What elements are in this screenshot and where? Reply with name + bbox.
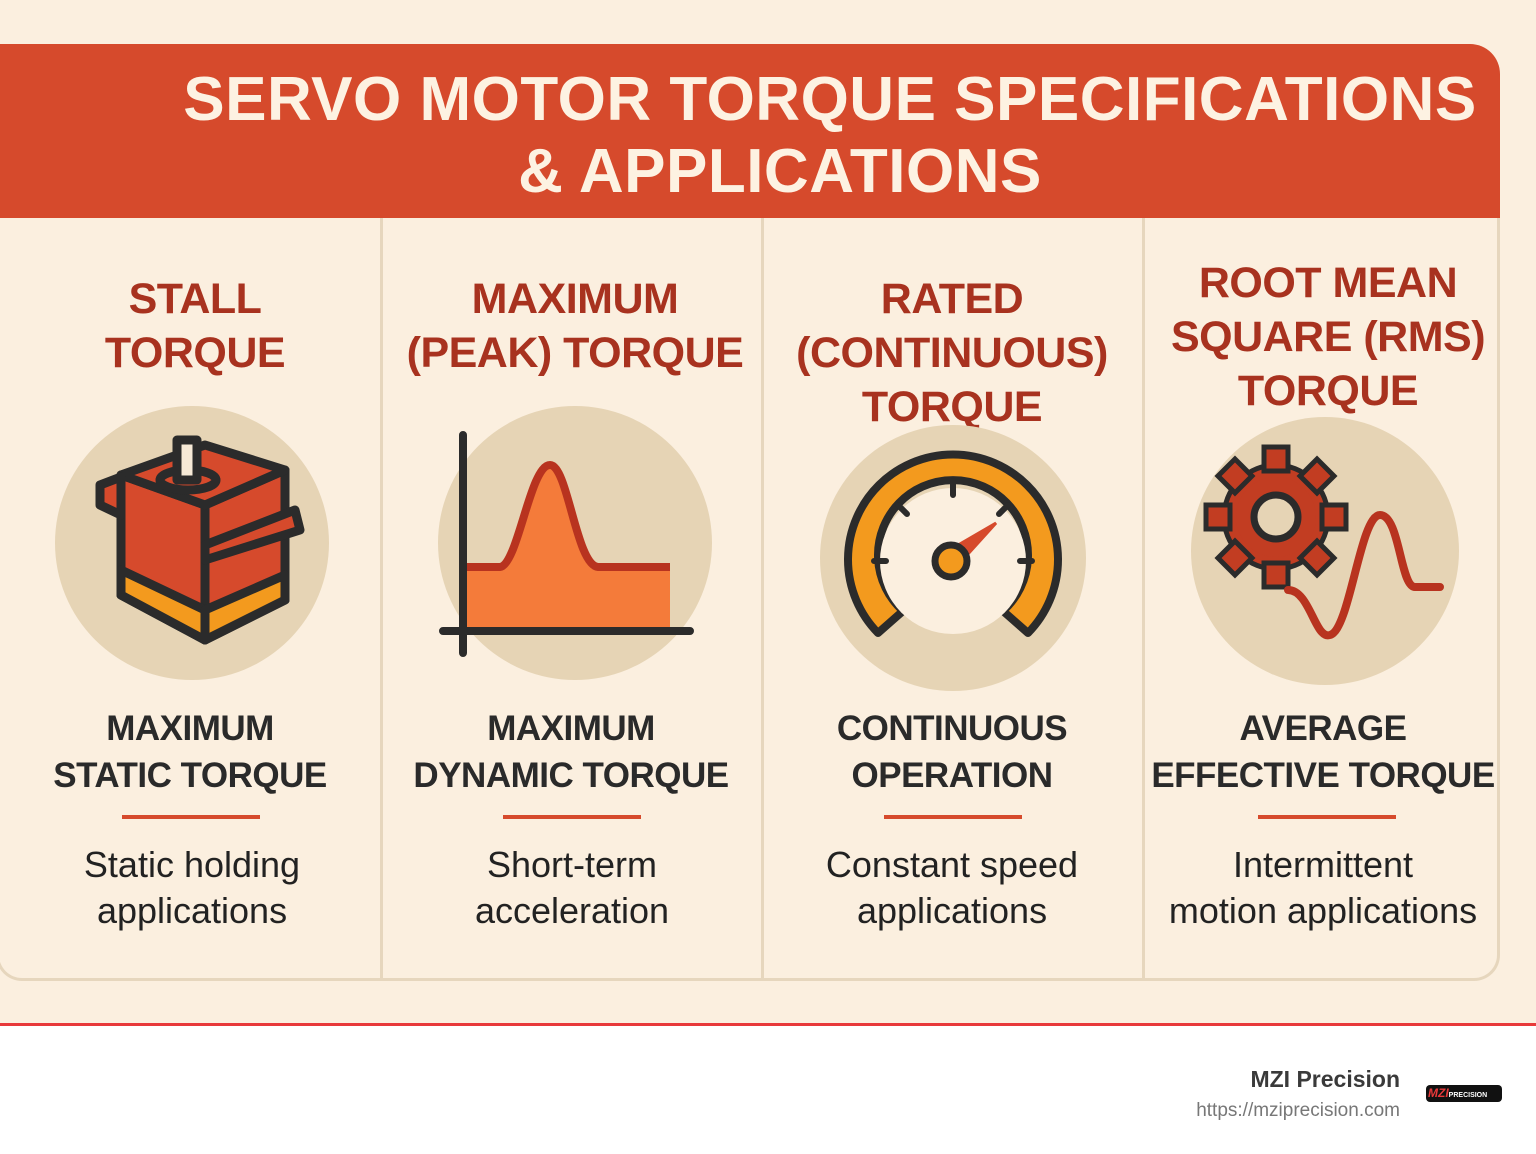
description <box>1169 844 1477 931</box>
subheading: OPERATION <box>852 756 1052 795</box>
description: Constant speed <box>826 844 1078 885</box>
heading: stall torque: STALL <box>129 275 261 323</box>
logo <box>1426 1085 1502 1102</box>
heading: peak torque: (PEAK) TORQUE <box>407 329 743 377</box>
subheading <box>53 709 327 795</box>
subheading: EFFECTIVE TORQUE <box>1151 756 1495 795</box>
subheading: MAXIMUM <box>106 709 274 748</box>
banner <box>0 44 1500 219</box>
heading: rated torque: (CONTINUOUS) <box>796 329 1108 377</box>
footer <box>0 1023 1536 1154</box>
heading: peak torque: MAXIMUM <box>472 275 678 323</box>
subheading: DYNAMIC TORQUE <box>413 756 729 795</box>
description: applications <box>97 890 287 931</box>
heading: rms torque: ROOT MEAN <box>1199 259 1457 307</box>
heading: rms torque: TORQUE <box>1238 367 1418 415</box>
description: acceleration <box>475 890 669 931</box>
description <box>84 844 300 931</box>
heading: stall torque: TORQUE <box>105 329 285 377</box>
url: https://mziprecision.com <box>1196 1100 1400 1121</box>
heading: stall torque <box>105 275 285 377</box>
description: Static holding <box>84 844 300 885</box>
subheading: STATIC TORQUE <box>53 756 327 795</box>
description: Intermittent <box>1233 844 1413 885</box>
title <box>183 65 1477 206</box>
icon: gear and wave <box>1191 417 1459 685</box>
heading: rated torque: TORQUE <box>862 383 1042 431</box>
subheading <box>837 709 1067 795</box>
heading: rated torque: RATED <box>881 275 1023 323</box>
subheading: CONTINUOUS <box>837 709 1067 748</box>
icon: peak chart <box>438 406 712 680</box>
heading: rms torque <box>1171 259 1485 415</box>
description: Short-term <box>487 844 657 885</box>
logo: MZIPRECISION <box>1428 1086 1487 1100</box>
icon: gauge <box>820 425 1086 691</box>
subheading: AVERAGE <box>1240 709 1406 748</box>
description <box>475 844 669 931</box>
title: SERVO MOTOR TORQUE SPECIFICATIONS <box>183 65 1477 134</box>
subheading <box>1151 709 1495 795</box>
panel container <box>0 218 1500 981</box>
title: & APPLICATIONS <box>518 137 1042 206</box>
subheading <box>413 709 729 795</box>
heading: rated torque <box>796 275 1108 431</box>
icon: servo motor <box>55 406 329 680</box>
description: motion applications <box>1169 890 1477 931</box>
description: applications <box>857 890 1047 931</box>
heading: rms torque: SQUARE (RMS) <box>1171 313 1485 361</box>
brand name: MZI Precision <box>1250 1066 1400 1092</box>
heading: peak torque <box>407 275 743 377</box>
subheading: MAXIMUM <box>487 709 655 748</box>
description <box>826 844 1078 931</box>
